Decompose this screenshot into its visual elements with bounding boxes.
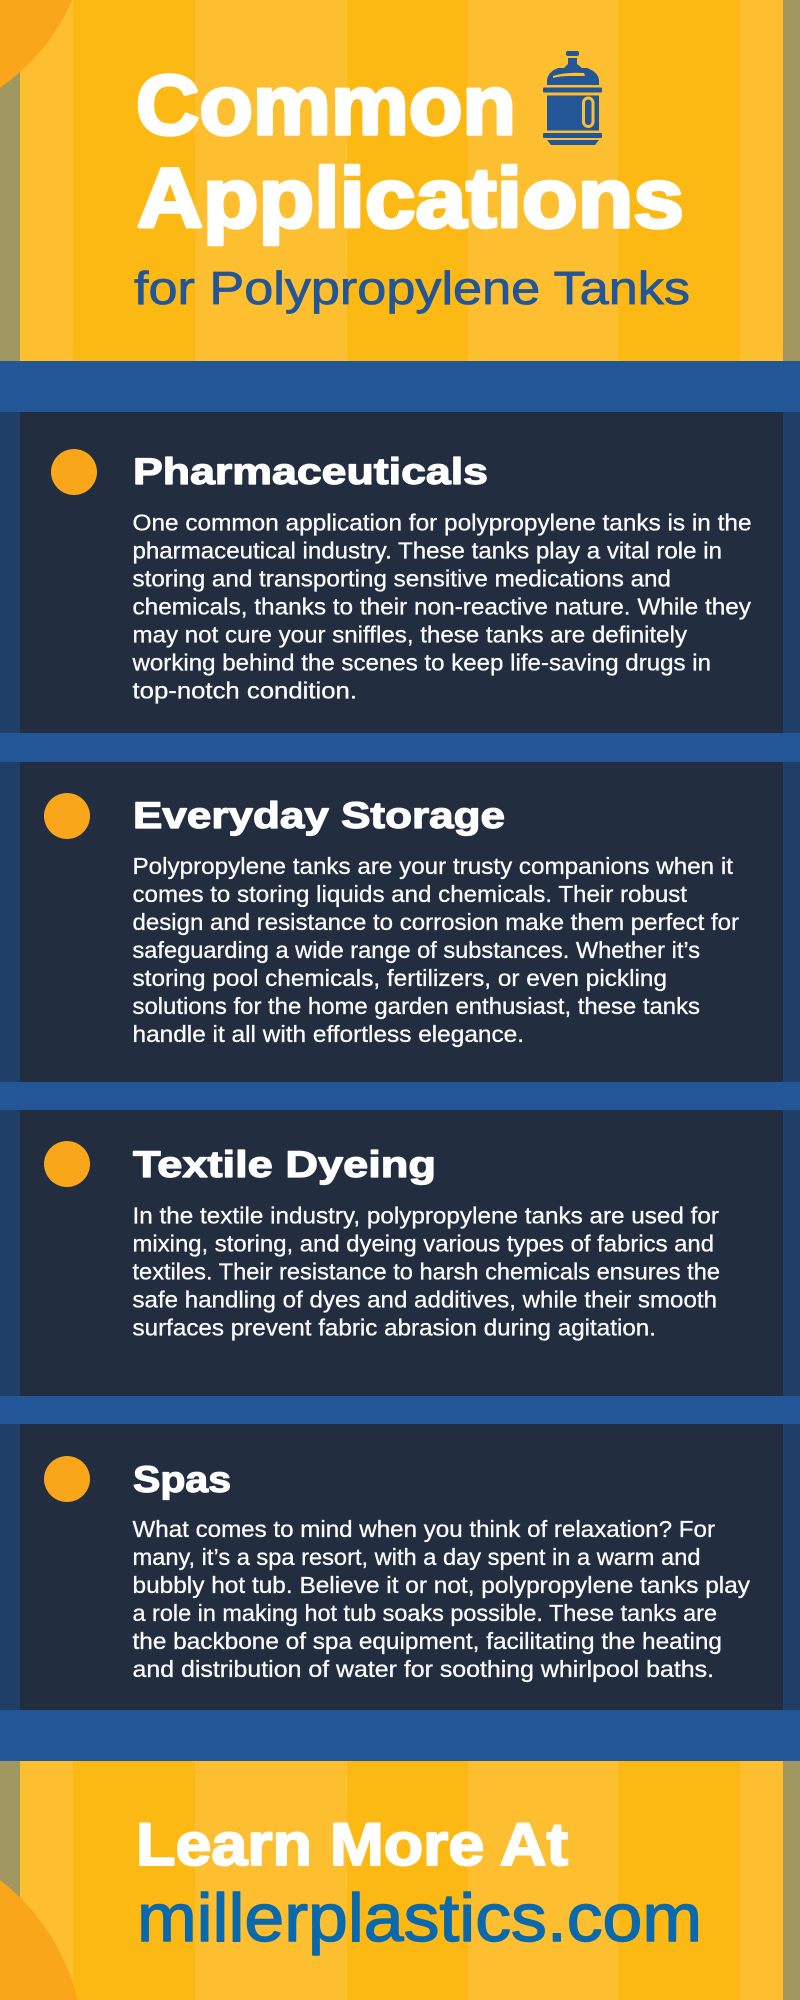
text block: everyday storage: comes to storing liquids and chemicals. Their robust <box>132 881 688 907</box>
text block: textile dyeing: textiles. Their resistance to harsh chemicals ensures the <box>132 1258 720 1284</box>
decorative orange corner: top left <box>0 0 72 88</box>
icon: bullet circle <box>51 449 97 495</box>
blue band: divider 1 <box>0 733 800 762</box>
blue band: below header <box>0 361 800 412</box>
text block: everyday storage: safeguarding a wide range of substances. Whether it’s <box>132 937 700 963</box>
panel: header background <box>0 0 800 361</box>
icon: bullet circle <box>44 1456 90 1502</box>
text block: pharmaceuticals: may not cure your sniffles, these tanks are definitely <box>132 622 688 648</box>
text block: spas: a role in making hot tub soaks possible. These tanks are <box>132 1600 717 1626</box>
text block: textile dyeing: mixing, storing, and dyeing various types of fabrics and <box>132 1230 714 1256</box>
blue band: divider 2 <box>0 1082 800 1110</box>
heading: textile dyeing: Textile Dyeing <box>133 1144 436 1185</box>
icon: bullet circle <box>44 793 90 839</box>
text block: textile dyeing: safe handling of dyes and additives, while their smooth <box>132 1286 717 1312</box>
text block: pharmaceuticals <box>131 510 752 704</box>
text block: spas: What comes to mind when you think of relaxation? For <box>132 1516 715 1542</box>
text block: pharmaceuticals: top-notch condition. <box>132 678 357 704</box>
panel: footer background <box>0 1761 800 2000</box>
text block: everyday storage: Polypropylene tanks are your trusty companions when it <box>132 853 734 879</box>
text block: pharmaceuticals: storing and transporting sensitive medications and <box>132 566 671 592</box>
text block: pharmaceuticals: One common application for polypropylene tanks is in the <box>132 510 752 536</box>
text block: spas <box>132 1516 751 1682</box>
text block: textile dyeing: surfaces prevent fabric abrasion during agitation. <box>132 1314 656 1340</box>
title <box>136 58 684 245</box>
footer heading: Learn More At <box>136 1811 568 1878</box>
panel: spas <box>0 1424 800 1710</box>
text block: spas: and distribution of water for soothing whirlpool baths. <box>132 1656 714 1682</box>
decorative orange corner: bottom left <box>0 1880 78 2000</box>
text block: everyday storage: handle it all with effortless elegance. <box>132 1021 524 1047</box>
blue band: above footer <box>0 1710 800 1761</box>
text block: textile dyeing: In the textile industry, polypropylene tanks are used for <box>132 1202 719 1228</box>
text block: everyday storage: design and resistance to corrosion make them perfect for <box>132 909 739 935</box>
panel: textile dyeing <box>0 1110 800 1396</box>
title: Common <box>136 58 516 152</box>
text block: spas: the backbone of spa equipment, facilitating the heating <box>132 1628 722 1654</box>
heading: everyday storage: Everyday Storage <box>133 795 505 836</box>
text block: spas: bubbly hot tub. Believe it or not, polypropylene tanks play <box>132 1572 751 1598</box>
panel: everyday storage <box>0 762 800 1082</box>
subtitle: for Polypropylene Tanks <box>134 262 690 314</box>
text block: textile dyeing <box>132 1202 720 1340</box>
title: Applications <box>137 151 684 245</box>
icon: water tank bottle <box>543 51 602 145</box>
text block: pharmaceuticals: working behind the scenes to keep life-saving drugs in <box>131 650 711 676</box>
text block: pharmaceuticals: chemicals, thanks to their non-reactive nature. While they <box>132 594 752 620</box>
blue band: divider 3 <box>0 1396 800 1424</box>
heading: pharmaceuticals: Pharmaceuticals <box>133 451 488 492</box>
text block: everyday storage: solutions for the home garden enthusiast, these tanks <box>132 993 700 1019</box>
text block: everyday storage: storing pool chemicals, fertilizers, or even pickling <box>132 965 667 991</box>
text block: everyday storage <box>132 853 739 1047</box>
heading: spas: Spas <box>133 1459 231 1500</box>
text block: pharmaceuticals: pharmaceutical industry. These tanks play a vital role in <box>132 538 722 564</box>
panel: pharmaceuticals <box>0 412 800 733</box>
icon: bullet circle <box>44 1141 90 1187</box>
text block: spas: many, it’s a spa resort, with a day spent in a warm and <box>132 1544 700 1570</box>
footer url: millerplastics.com <box>137 1880 702 1956</box>
